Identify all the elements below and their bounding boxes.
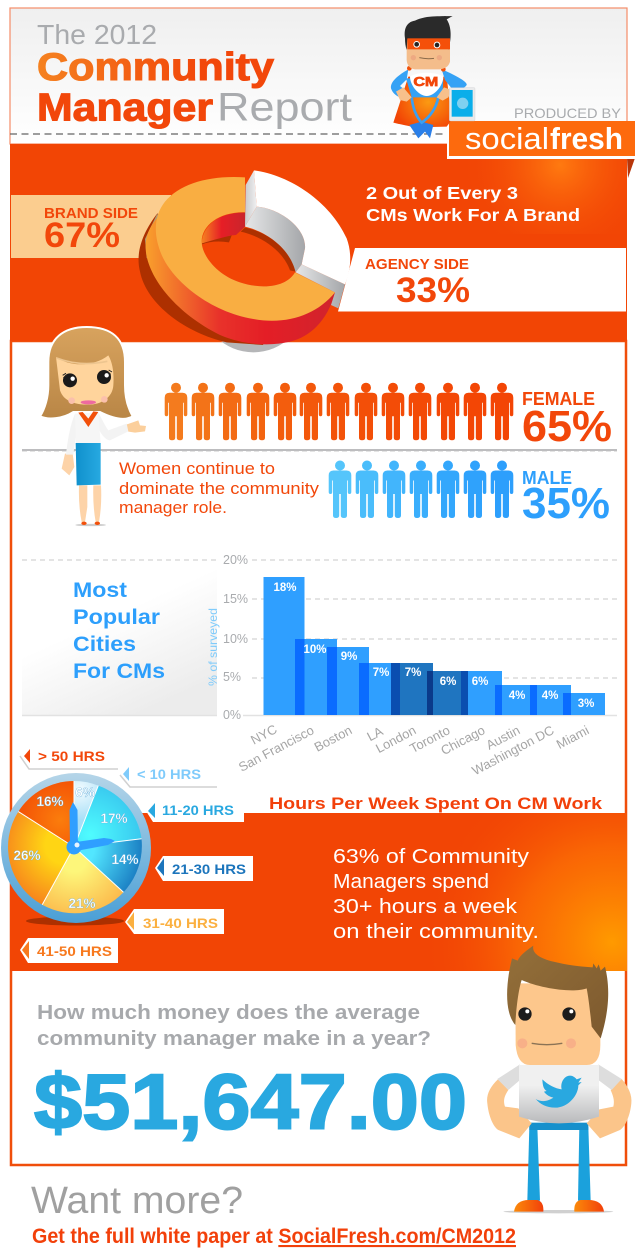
salary question: community manager make in a year? xyxy=(37,1028,431,1050)
panel: cities heading xyxy=(22,566,217,715)
brand headline: CMs Work For A Brand xyxy=(366,205,580,225)
white paper link: Get the full white paper at SocialFresh.com/CM2012 xyxy=(32,1225,516,1248)
bar values: 18% xyxy=(273,582,297,594)
tag: 21-30 hrs xyxy=(155,856,253,881)
y axis labels: 0% xyxy=(223,708,241,722)
brand headline: 2 Out of Every 3 xyxy=(366,183,518,203)
logo banner: socialfresh: fresh xyxy=(550,121,623,156)
salary question xyxy=(37,1002,431,1050)
title: The 2012 xyxy=(37,19,157,50)
icon: superhero community manager xyxy=(391,16,475,138)
tag: 41-50 hrs: 41-50 HRS xyxy=(37,943,112,959)
title: Manager xyxy=(37,86,213,130)
city labels xyxy=(236,721,592,778)
male pictogram row xyxy=(329,460,513,518)
panel: brand vs agency xyxy=(10,144,627,352)
title: Report xyxy=(217,86,352,130)
brand side label xyxy=(44,205,138,255)
text: women continue: dominate the community xyxy=(119,480,320,498)
panel: cities heading: Cities xyxy=(73,633,136,656)
city labels: Boston xyxy=(312,722,354,755)
text: women continue: manager role. xyxy=(119,499,227,517)
y axis labels xyxy=(223,553,248,722)
tag: over 50 hrs: > 50 HRS xyxy=(38,748,105,764)
panel: cities heading: For CMs xyxy=(73,660,165,683)
tag: 41-50 hrs xyxy=(20,938,118,963)
footer call to action xyxy=(31,1180,516,1248)
twitter boy illustration xyxy=(487,946,631,1213)
panel: cities heading: Popular xyxy=(73,606,160,629)
female label: FEMALE xyxy=(522,389,595,409)
city labels: London xyxy=(373,722,418,756)
tag: 31-40 hrs: 31-40 HRS xyxy=(143,915,218,931)
tag: 11-20 hrs: 11-20 HRS xyxy=(162,802,234,818)
clock percentages: 17% xyxy=(100,811,128,826)
produced by: PRODUCED BY xyxy=(514,105,622,121)
hours text: Managers spend xyxy=(333,871,489,893)
tablet xyxy=(449,88,475,121)
hours text: 63% of Community xyxy=(333,846,529,868)
CM badge text: CM xyxy=(413,74,438,89)
y axis labels: 15% xyxy=(223,592,248,606)
clock percentages: 6% xyxy=(75,785,95,800)
clock percentages: 21% xyxy=(68,896,96,911)
clock percentages: 14% xyxy=(111,852,139,867)
logo banner: socialfresh: social xyxy=(465,121,549,156)
brand headline xyxy=(366,183,580,225)
brand side label: 67% xyxy=(44,216,120,255)
hours text: on their community. xyxy=(333,921,539,943)
agency side label: AGENCY SIDE xyxy=(365,256,469,273)
panel: cities heading: Most xyxy=(73,579,127,602)
clock hands xyxy=(70,802,115,851)
tag: 31-40 hrs xyxy=(125,909,224,934)
title xyxy=(37,19,352,130)
y axis title: % of surveyed xyxy=(206,608,220,686)
female label: 65% xyxy=(522,402,612,451)
donut chart xyxy=(139,170,350,352)
bar values: 10% xyxy=(303,644,327,656)
hours heading: Hours Per Week Spent On CM Work xyxy=(269,795,603,813)
logo banner: socialfresh xyxy=(447,105,635,178)
panel: white background frame xyxy=(11,341,626,1165)
want more: Want more? xyxy=(31,1180,243,1222)
bar values: 6% xyxy=(440,676,456,688)
city labels: LA xyxy=(364,723,386,744)
male label: MALE xyxy=(522,468,572,488)
text: women continue: Women continue to xyxy=(119,460,275,478)
hours text xyxy=(333,846,539,943)
text: women continue xyxy=(119,460,320,517)
male label: 35% xyxy=(522,479,610,528)
brand side band xyxy=(11,195,171,258)
bar values: 4% xyxy=(542,690,558,702)
bar values: 3% xyxy=(578,698,594,710)
woman illustration xyxy=(40,327,146,526)
bar values: 4% xyxy=(509,690,525,702)
hours text: 30+ hours a week xyxy=(333,896,518,918)
bar values xyxy=(273,582,594,710)
bar values: 9% xyxy=(341,651,357,663)
agency side band xyxy=(338,248,626,312)
city labels: Austin xyxy=(483,722,522,753)
clock pie chart xyxy=(1,773,151,926)
bar values: 7% xyxy=(373,667,389,679)
bar chart: cities xyxy=(22,553,617,778)
city labels: NYC xyxy=(248,721,279,748)
tag: over 50 hrs xyxy=(20,748,118,769)
city labels: San Francisco xyxy=(236,722,316,775)
panel: header xyxy=(10,8,627,144)
icon: twitter bird xyxy=(536,1076,582,1108)
agency side label: 33% xyxy=(396,271,470,310)
city labels: Toronto xyxy=(407,722,452,756)
title: Community xyxy=(37,46,274,89)
panel: hours per week xyxy=(10,795,627,971)
bar values: 6% xyxy=(472,676,488,688)
salary figure: $51,647.00 xyxy=(34,1058,467,1146)
city labels: Miami xyxy=(554,722,592,752)
y axis labels: 10% xyxy=(223,632,248,646)
clock percentages: 26% xyxy=(13,848,41,863)
tag: under 10 hrs xyxy=(120,766,217,787)
y axis labels: 5% xyxy=(223,670,241,684)
city labels: Washington DC xyxy=(469,722,556,778)
clock percentages xyxy=(13,785,139,911)
female pictogram row xyxy=(165,383,513,440)
city labels: Chicago xyxy=(438,722,487,758)
tag: under 10 hrs: < 10 HRS xyxy=(137,766,201,782)
salary question: How much money does the average xyxy=(37,1002,420,1024)
y axis labels: 20% xyxy=(223,553,248,567)
bar values: 7% xyxy=(405,667,421,679)
tag: 11-20 hrs xyxy=(146,802,244,822)
panel: salary xyxy=(34,1002,467,1146)
agency side label xyxy=(365,256,470,310)
clock percentages: 16% xyxy=(36,794,64,809)
bars xyxy=(264,577,605,715)
tag: 21-30 hrs: 21-30 HRS xyxy=(172,861,246,877)
brand side label: BRAND SIDE xyxy=(44,205,138,222)
